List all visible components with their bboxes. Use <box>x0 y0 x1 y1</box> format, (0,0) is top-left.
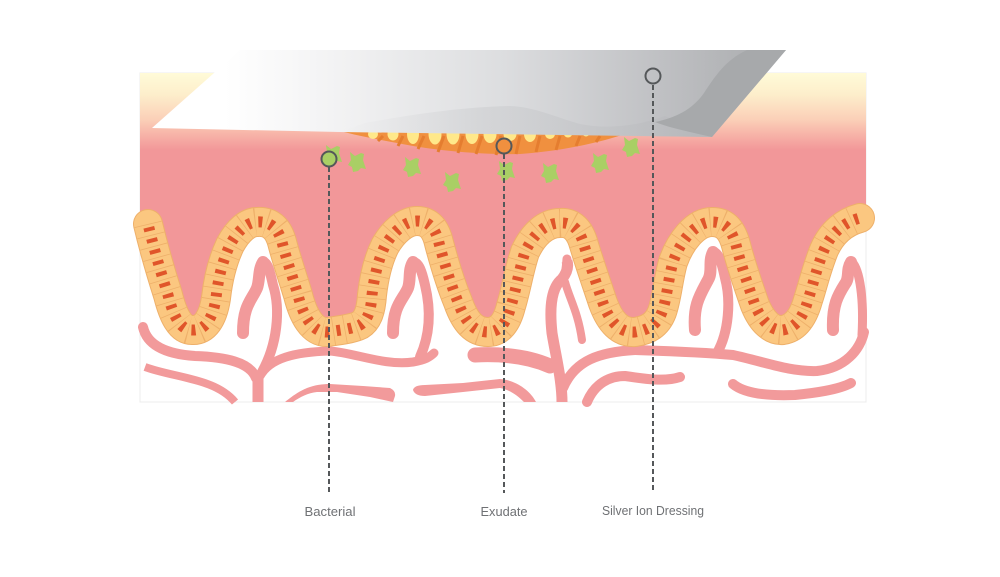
leader: bacterial <box>322 152 336 493</box>
vessel: centre loop with stem <box>551 259 582 402</box>
vessel: lower branch <box>587 376 680 402</box>
bacteria: green cells <box>324 137 640 192</box>
panel: tissue background <box>140 73 866 402</box>
epithelium: cell layer with nuclei <box>148 218 860 332</box>
label: bacterial: Bacterial <box>304 504 356 519</box>
vessel: loop four <box>695 252 728 353</box>
yellow exudate droplets <box>368 124 589 144</box>
dressing lower wave band <box>340 106 712 137</box>
vessel: centre blob <box>475 355 550 366</box>
vessel: loop five <box>833 262 863 335</box>
vessel: long right branch <box>563 332 864 388</box>
vessel: lower left tube <box>285 384 395 402</box>
label: exudate: Exudate <box>480 504 528 519</box>
label: silver ion dressing: Silver Ion Dressing <box>602 503 704 518</box>
vessel: loop one <box>243 262 277 372</box>
darker orange streaks <box>378 136 600 155</box>
leader: silver ion dressing <box>646 68 660 493</box>
exudate: orange layer under dressing <box>340 124 625 155</box>
vessels: dermal blood vessel network <box>143 252 864 402</box>
vessel: left branching trunk <box>143 327 434 402</box>
vessel: loop two <box>393 262 429 357</box>
dressing darker right fold <box>655 50 786 137</box>
silver ion dressing <box>152 50 786 137</box>
vessel: lower right tube <box>733 383 851 395</box>
vessel: lower centre tube <box>413 379 536 402</box>
leader: exudate <box>496 138 512 493</box>
